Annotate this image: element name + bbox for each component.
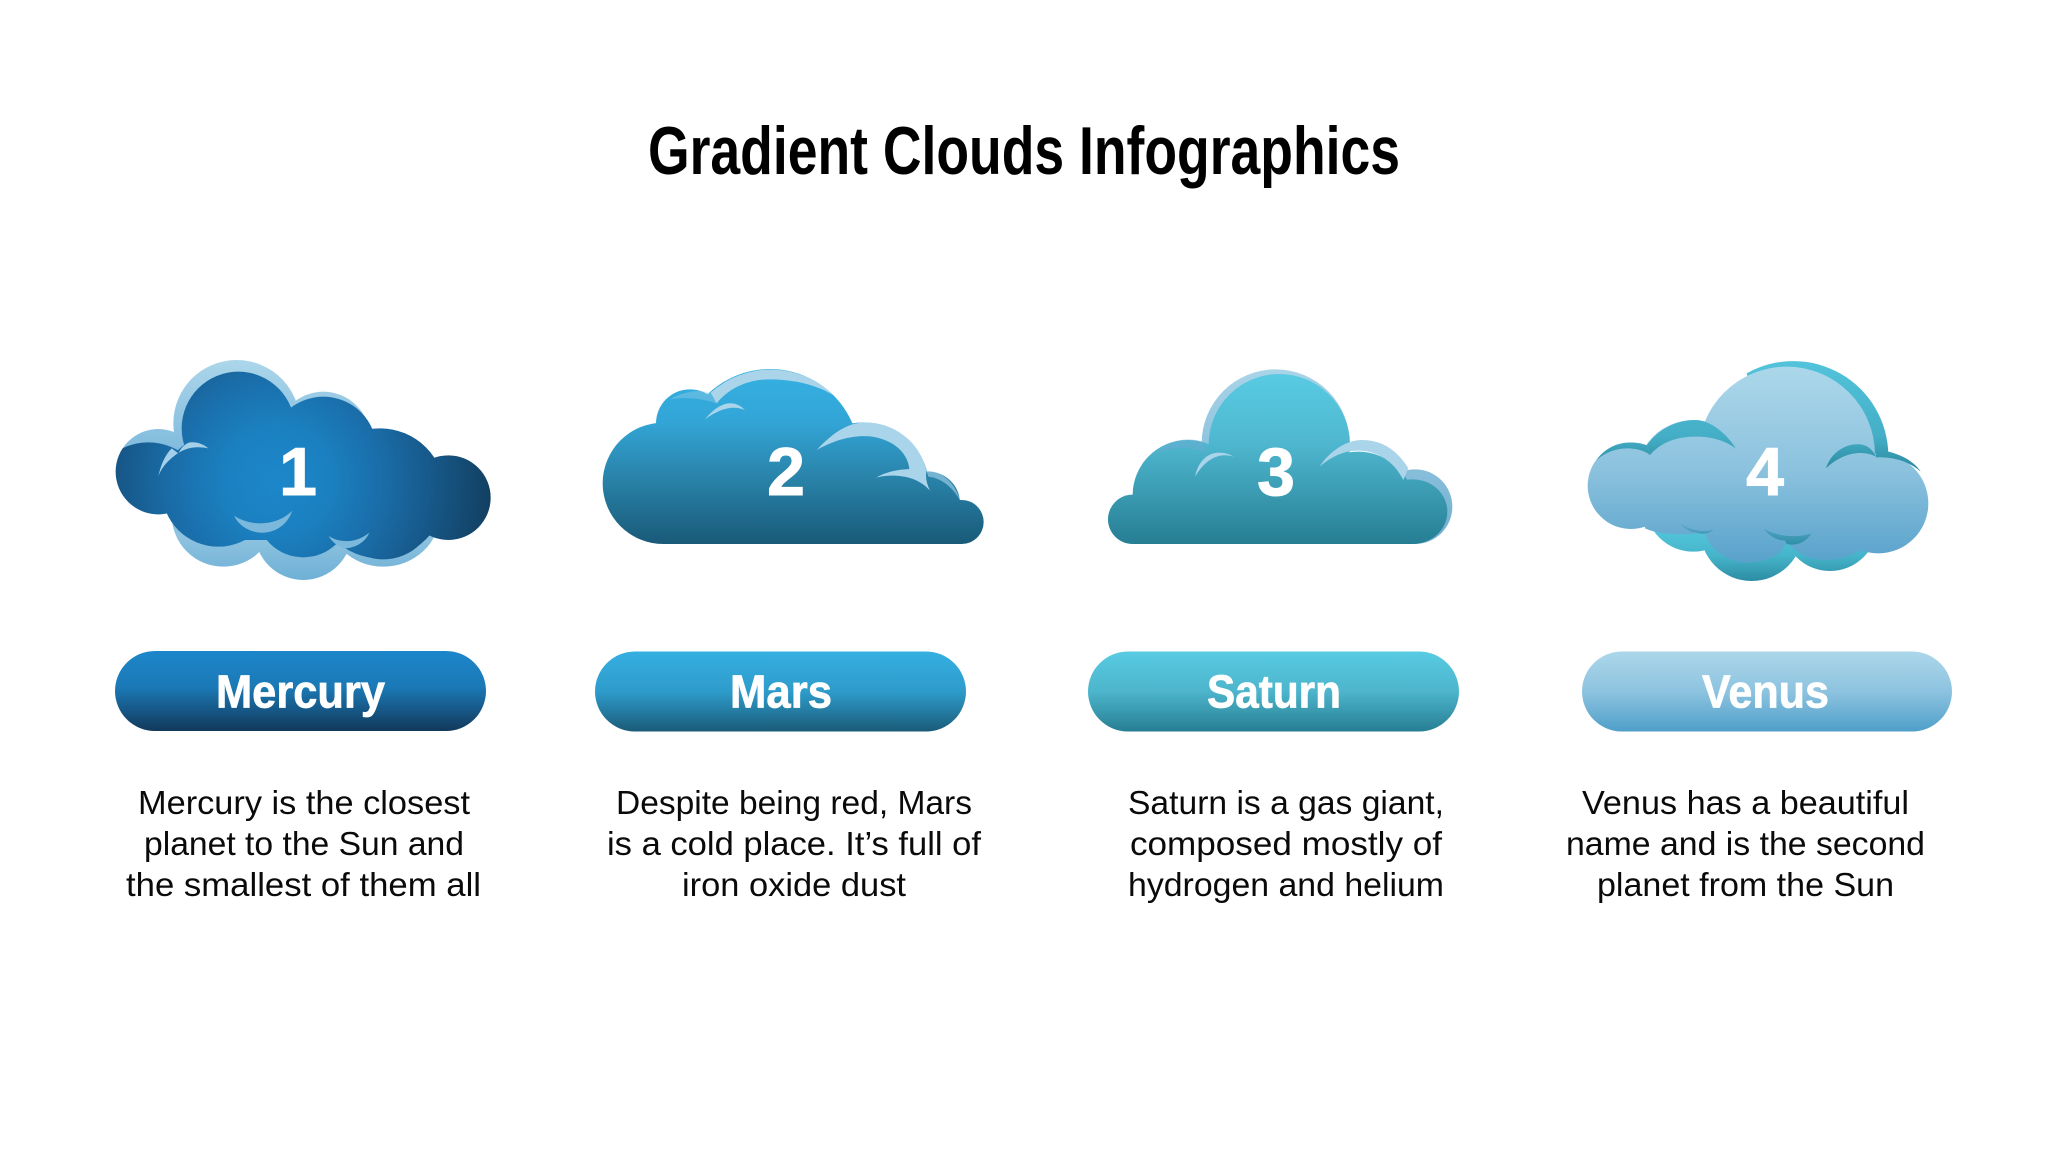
text: Venus description: planet from the Sun	[1597, 867, 1894, 904]
text: Saturn description: hydrogen and helium	[1128, 867, 1444, 904]
cloud 2	[603, 369, 984, 554]
text: Mars description: is a cold place. It’s full of	[607, 826, 982, 863]
pill: Saturn: Saturn	[1207, 666, 1341, 718]
text: Venus description: Venus has a beautiful	[1582, 785, 1909, 822]
text: Mars description: iron oxide dust	[682, 867, 907, 904]
pill: Venus: Venus	[1702, 666, 1829, 718]
cloud 3	[1108, 369, 1452, 544]
pill: Mars	[595, 652, 966, 732]
number 1: 1	[279, 434, 317, 510]
pill: Mercury	[115, 651, 486, 731]
pill: Mercury: Mercury	[216, 666, 385, 718]
text: Venus description: name and is the second	[1566, 826, 1925, 863]
number 2: 2	[767, 434, 805, 510]
text: Mars description: Despite being red, Mars	[616, 785, 972, 822]
text: Saturn description	[1128, 785, 1444, 904]
cloud 1	[89, 360, 491, 580]
text: Mercury description: planet to the Sun and	[144, 826, 464, 863]
cloud 4	[1588, 361, 1928, 581]
text: Mars description	[607, 785, 982, 904]
number 3: 3	[1257, 434, 1295, 510]
text: Mercury description: Mercury is the closest	[138, 785, 471, 822]
text: Saturn description: composed mostly of	[1130, 826, 1443, 863]
title: Gradient Clouds Infographics	[648, 113, 1400, 189]
number 4: 4	[1746, 434, 1784, 510]
pill: Saturn	[1088, 652, 1459, 732]
text: Venus description	[1566, 785, 1925, 904]
text: Mercury description: the smallest of them all	[126, 867, 481, 904]
pill: Mars: Mars	[730, 666, 832, 718]
pill: Venus	[1582, 652, 1952, 732]
text: Mercury description	[126, 785, 481, 904]
text: Saturn description: Saturn is a gas giant,	[1128, 785, 1444, 822]
